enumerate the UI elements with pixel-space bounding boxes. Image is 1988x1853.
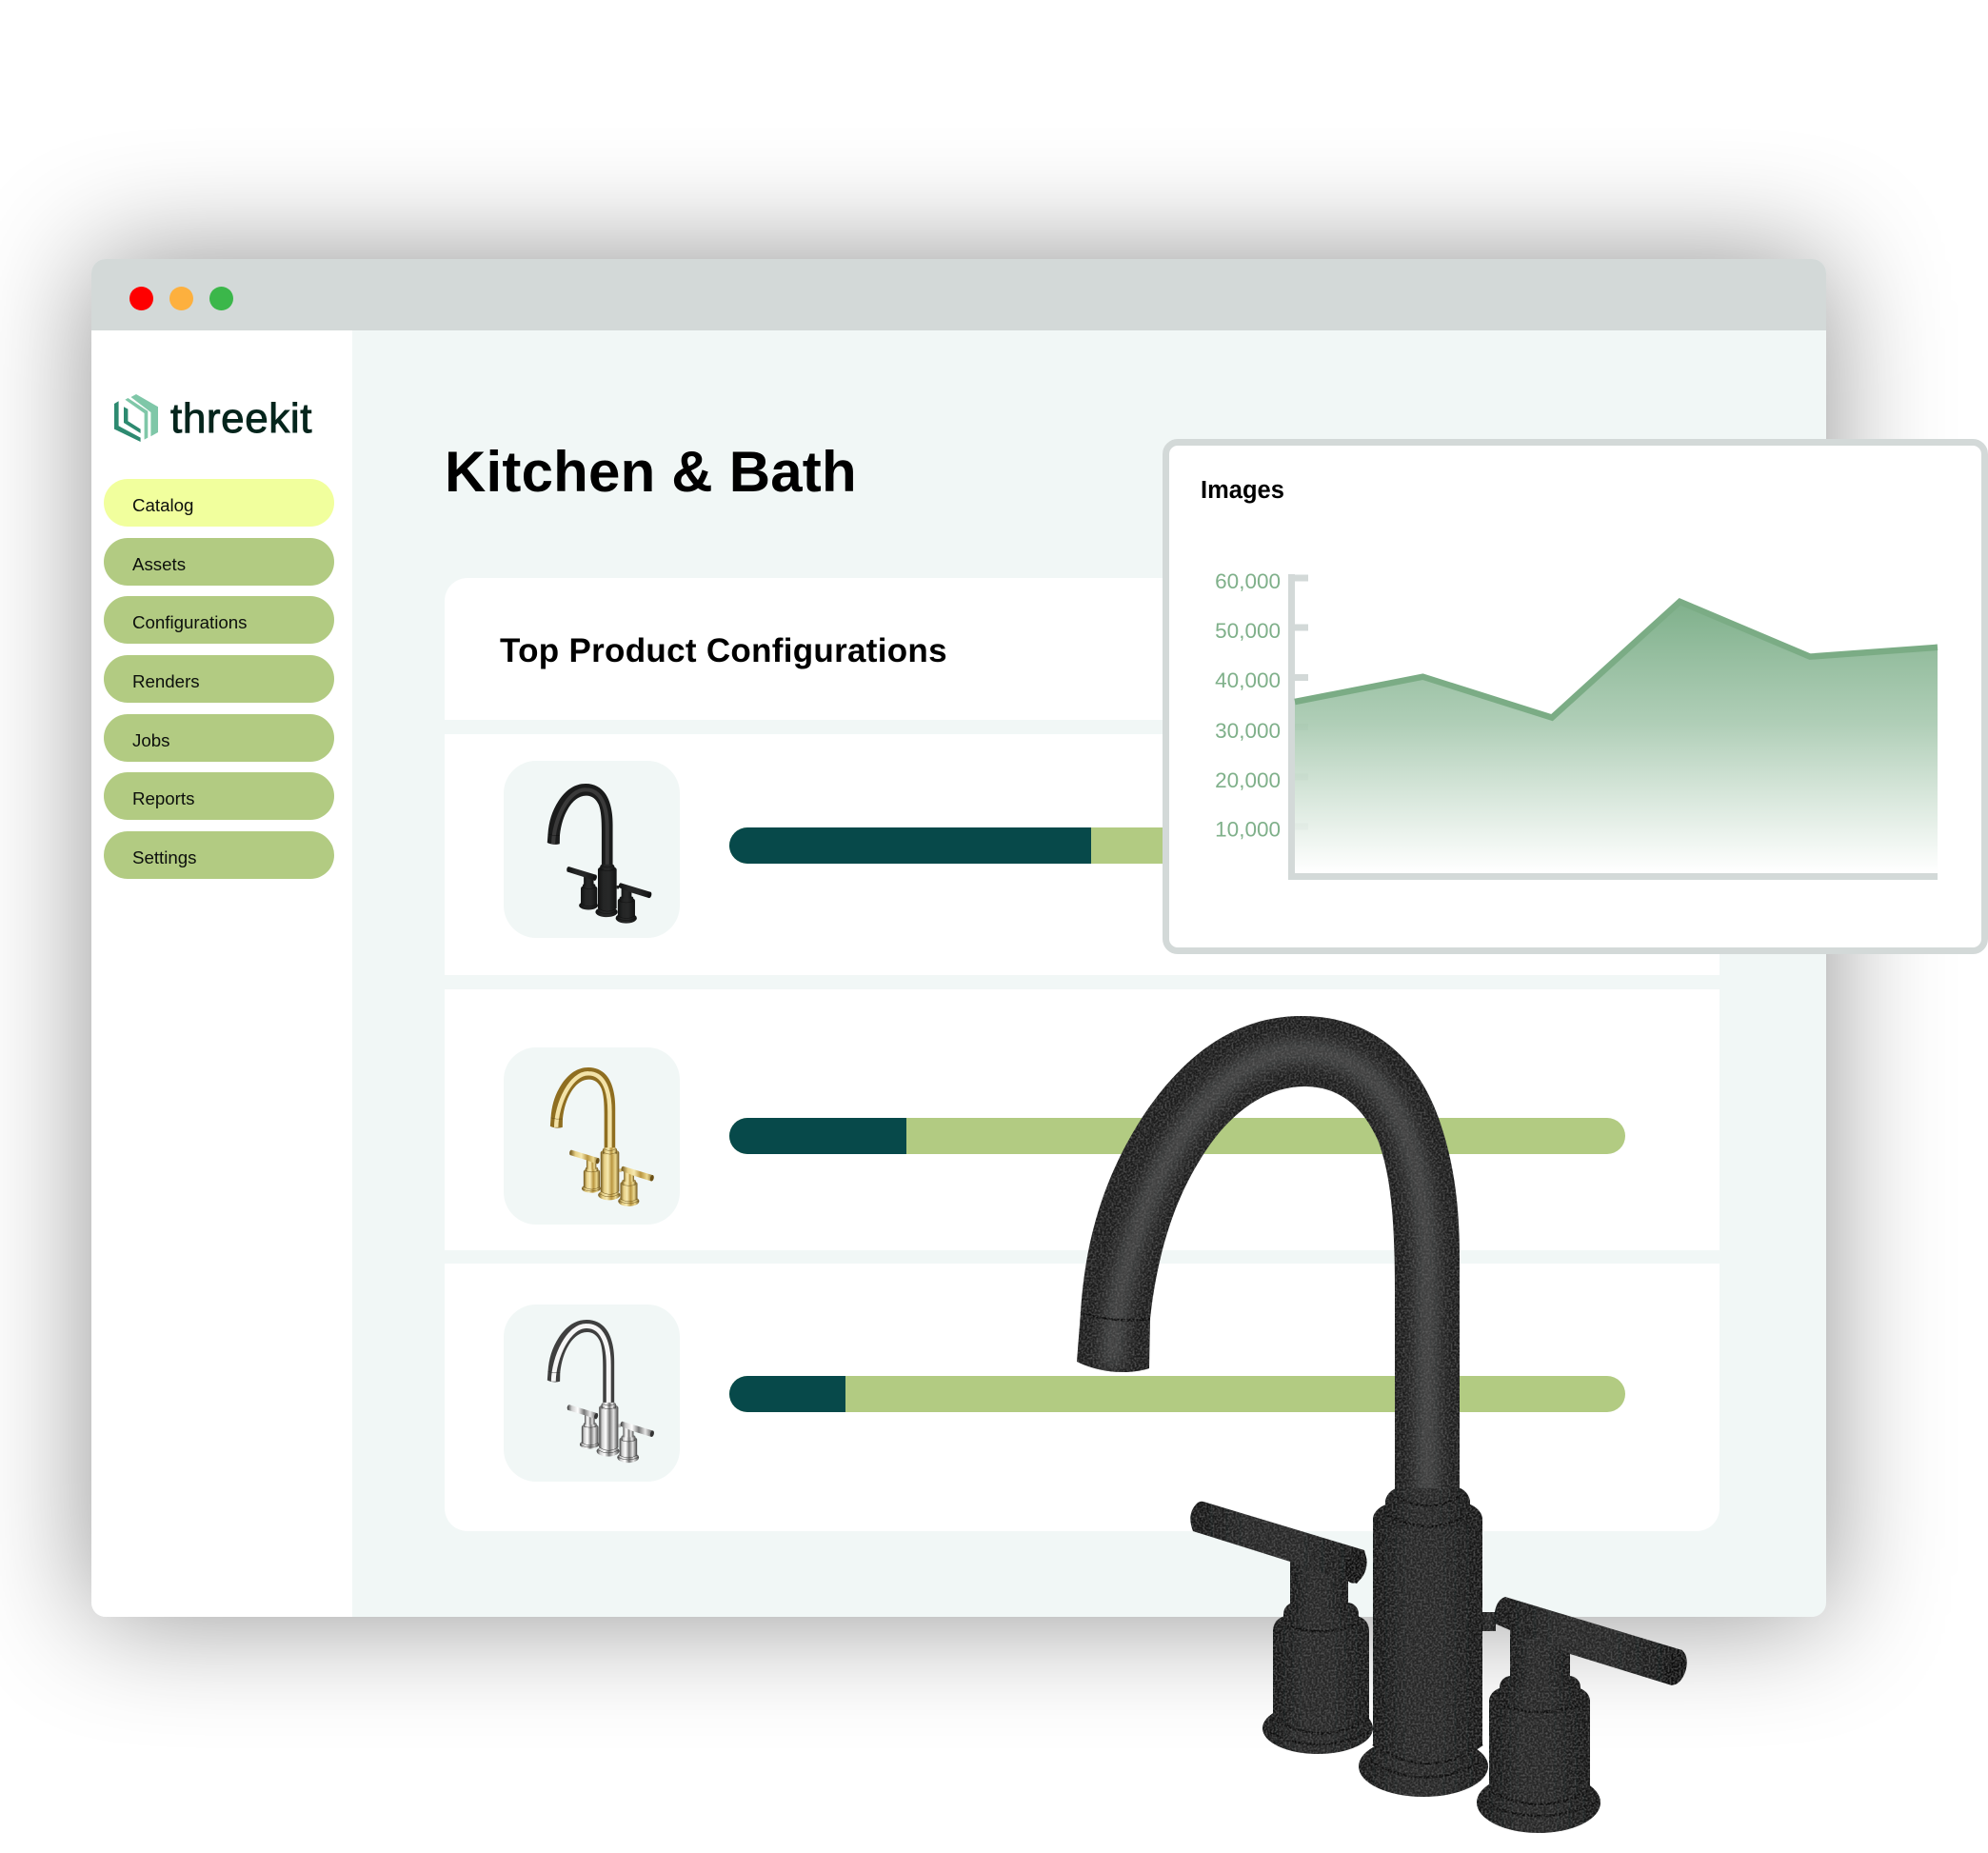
y axis labels: 20,000 bbox=[1215, 768, 1281, 792]
nav item: Assets bbox=[104, 538, 334, 586]
sidebar background bbox=[91, 330, 352, 1617]
x axis bbox=[1288, 873, 1938, 880]
panel: table header bbox=[445, 578, 1720, 720]
chart heading: Images bbox=[1201, 477, 1284, 504]
panel: images chart card bbox=[1163, 439, 1988, 954]
progress bar bbox=[729, 827, 1625, 863]
nav item: Assets: Assets bbox=[132, 554, 186, 573]
nav item: Renders: Renders bbox=[132, 670, 200, 691]
data line bbox=[1295, 602, 1938, 718]
heading: Top Product Configurations bbox=[500, 632, 947, 669]
nav item: Configurations: Configurations bbox=[132, 611, 248, 632]
nav item: Reports: Reports bbox=[132, 788, 194, 807]
y axis bbox=[1288, 574, 1295, 880]
wordmark: threekit bbox=[170, 395, 312, 442]
y axis labels bbox=[1215, 569, 1281, 842]
nav item: Catalog: Catalog bbox=[132, 495, 193, 514]
nav item: Reports bbox=[104, 772, 334, 820]
icon: chrome faucet thumbnail bbox=[547, 1320, 655, 1463]
area chart bbox=[1215, 569, 1938, 880]
icon: gold faucet thumbnail bbox=[550, 1067, 654, 1206]
progress bar bbox=[729, 1375, 1625, 1411]
logo: threekit bbox=[114, 394, 312, 442]
thumbnail tile bbox=[504, 761, 680, 938]
panel: row 3 bbox=[445, 1264, 1720, 1531]
title bar bbox=[91, 259, 1826, 330]
nav item: Jobs bbox=[104, 714, 334, 762]
overlay graphics bbox=[547, 573, 1938, 1833]
browser window bbox=[91, 259, 1826, 1617]
nav item: Configurations bbox=[104, 596, 334, 644]
progress bar bbox=[729, 1118, 1625, 1154]
window control: green bbox=[209, 286, 232, 310]
y axis labels: 10,000 bbox=[1215, 817, 1281, 842]
thumbnail tile bbox=[504, 1047, 680, 1225]
icon: large black faucet bbox=[1077, 1016, 1691, 1833]
area fill bbox=[1295, 602, 1938, 873]
nav item: Settings: Settings bbox=[132, 847, 197, 867]
sidebar navigation bbox=[104, 479, 334, 879]
tick marks bbox=[1295, 575, 1308, 830]
y axis labels: 50,000 bbox=[1215, 619, 1281, 643]
nav item: Settings bbox=[104, 831, 334, 879]
title: Kitchen & Bath bbox=[445, 440, 857, 504]
window control: orange bbox=[169, 286, 192, 310]
icon: threekit hexagon mark bbox=[114, 394, 158, 442]
panel: row 2 bbox=[445, 989, 1720, 1250]
y axis labels: 60,000 bbox=[1215, 569, 1281, 593]
nav item: Jobs: Jobs bbox=[132, 729, 169, 750]
thumbnail tile bbox=[504, 1305, 680, 1482]
nav item: Renders bbox=[104, 655, 334, 703]
icon: black faucet thumbnail bbox=[547, 784, 652, 924]
panel: row 1 bbox=[445, 734, 1720, 975]
y axis labels: 40,000 bbox=[1215, 668, 1281, 692]
y axis labels: 30,000 bbox=[1215, 719, 1281, 743]
nav item: Catalog bbox=[104, 479, 334, 527]
window control: red bbox=[129, 286, 152, 310]
